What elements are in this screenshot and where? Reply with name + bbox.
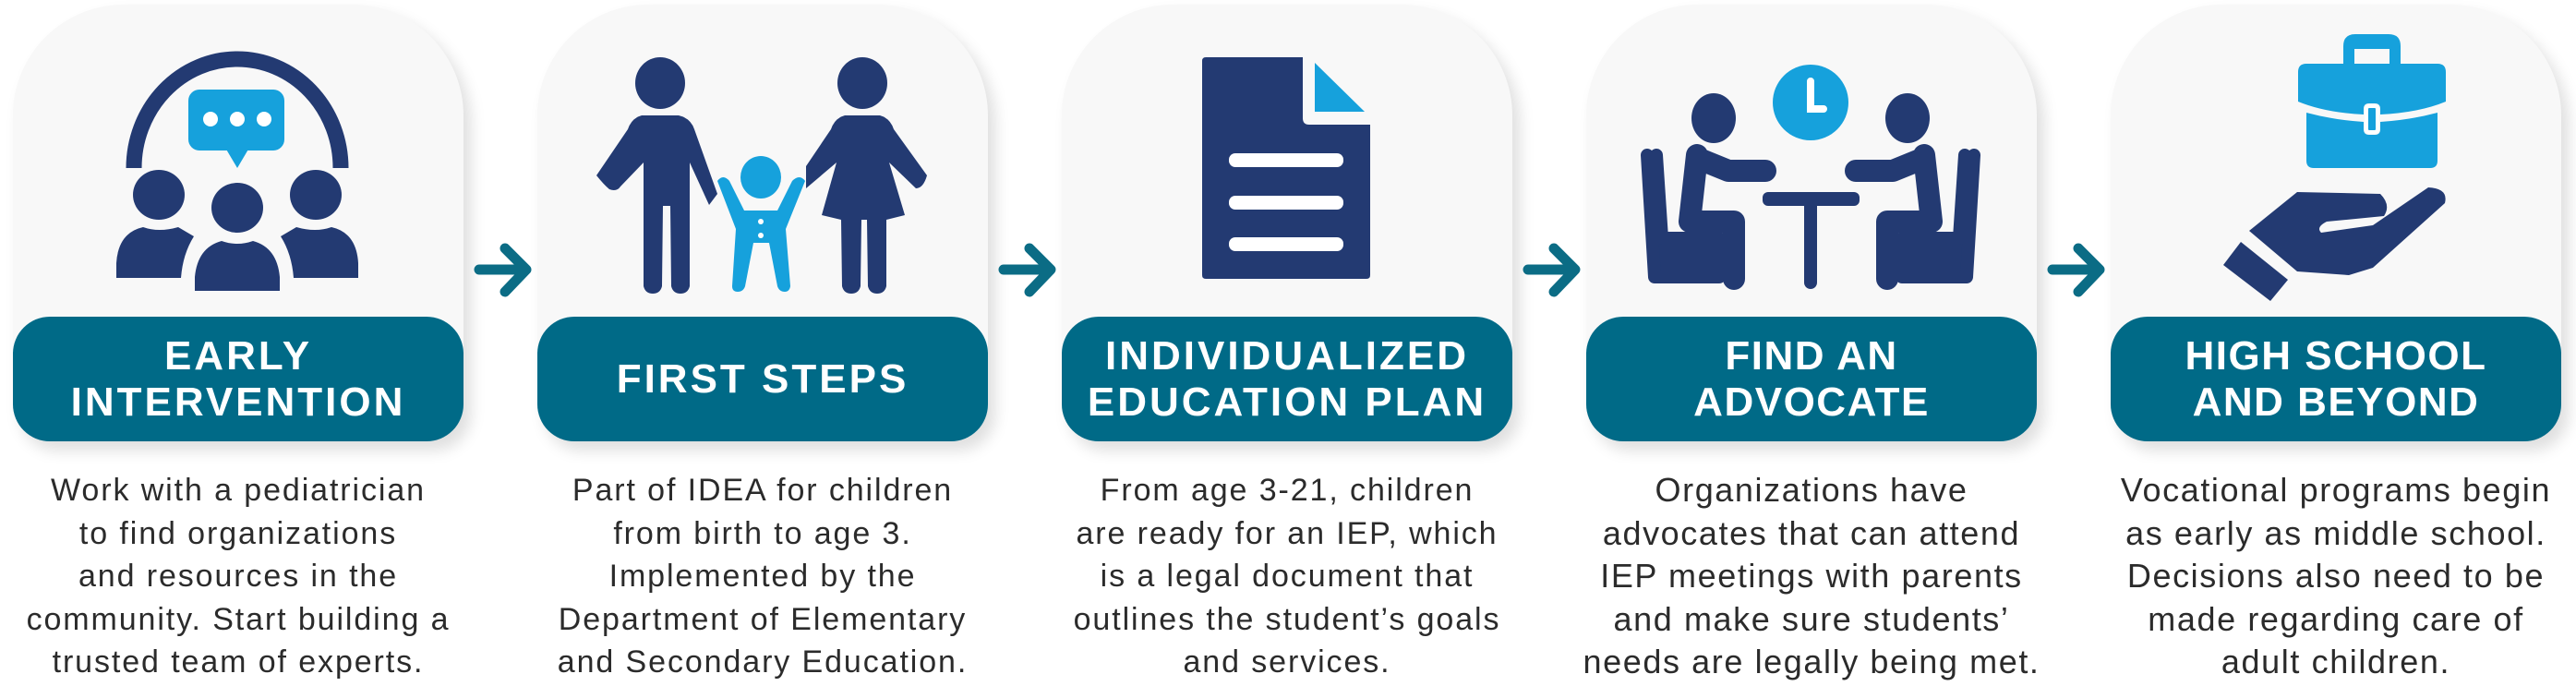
heading: high school and beyond: [2111, 317, 2561, 441]
text: high school and beyond: as early as middle school.: [2125, 513, 2546, 552]
heading: IEP: INDIVIDUALIZED: [1105, 332, 1469, 379]
text: early intervention: community. Start building a: [27, 602, 450, 637]
panel: early intervention: [13, 5, 463, 441]
heading: early intervention: EARLY: [164, 332, 312, 379]
heading: find an advocate: ADVOCATE: [1693, 379, 1930, 425]
heading: IEP: EDUCATION PLAN: [1088, 379, 1487, 425]
arrow 1: [479, 248, 526, 292]
text: find an advocate: advocates that can attend: [1603, 513, 2020, 552]
heading: IEP: [1062, 317, 1512, 441]
text: first steps: Department of Elementary: [559, 602, 967, 637]
text: IEP: [1074, 473, 1500, 680]
arrow 4: [2052, 248, 2100, 292]
text: find an advocate: Organizations have: [1655, 471, 1968, 509]
text: high school and beyond: made regarding care of: [2148, 600, 2524, 637]
text: first steps: Part of IDEA for children: [572, 473, 953, 508]
text: first steps: Implemented by the: [609, 559, 916, 594]
icon: team with speech bubble: [116, 59, 358, 291]
heading: find an advocate: [1586, 317, 2037, 441]
text: find an advocate: [1583, 471, 2040, 680]
text: high school and beyond: Vocational programs begin: [2121, 471, 2551, 509]
text: find an advocate: IEP meetings with parents: [1600, 557, 2023, 595]
icon: family: [596, 57, 927, 294]
heading: find an advocate: FIND AN: [1725, 332, 1898, 379]
heading: early intervention: INTERVENTION: [71, 379, 405, 425]
text: IEP: and services.: [1183, 644, 1390, 680]
icon: hand with briefcase: [2223, 34, 2446, 301]
icon: document: [1202, 57, 1370, 279]
text: IEP: is a legal document that: [1101, 559, 1474, 594]
heading: early intervention: [13, 317, 463, 441]
text: early intervention: Work with a pediatrician: [51, 473, 426, 508]
text: IEP: are ready for an IEP, which: [1076, 515, 1498, 550]
text: find an advocate: and make sure students’: [1613, 600, 2010, 637]
text: first steps: and Secondary Education.: [558, 644, 968, 680]
arrow 2: [1004, 248, 1051, 292]
icon: meeting at table: [1647, 65, 1974, 283]
text: first steps: [558, 473, 968, 680]
text: IEP: From age 3-21, children: [1101, 473, 1474, 508]
text: early intervention: and resources in the: [78, 559, 398, 594]
text: early intervention: to find organizations: [79, 515, 397, 550]
panel: first steps: [537, 5, 988, 441]
arrow 3: [1528, 248, 1575, 292]
panel: find an advocate: [1586, 5, 2037, 441]
panel: high school and beyond: [2111, 5, 2561, 441]
heading: high school and beyond: AND BEYOND: [2193, 379, 2479, 425]
heading: high school and beyond: HIGH SCHOOL: [2185, 332, 2486, 379]
text: high school and beyond: Decisions also need to be: [2127, 557, 2545, 595]
text: early intervention: [27, 473, 450, 680]
heading: first steps: FIRST STEPS: [617, 356, 909, 401]
text: find an advocate: needs are legally being met.: [1583, 643, 2040, 680]
arrows: [479, 248, 2100, 292]
heading: first steps: [537, 317, 988, 441]
text: IEP: outlines the student’s goals: [1074, 602, 1500, 637]
text: high school and beyond: adult children.: [2221, 643, 2450, 680]
text: first steps: from birth to age 3.: [613, 515, 912, 550]
text: high school and beyond: [2121, 471, 2551, 680]
text: early intervention: trusted team of experts.: [53, 644, 424, 680]
panel: IEP: [1062, 5, 1512, 441]
